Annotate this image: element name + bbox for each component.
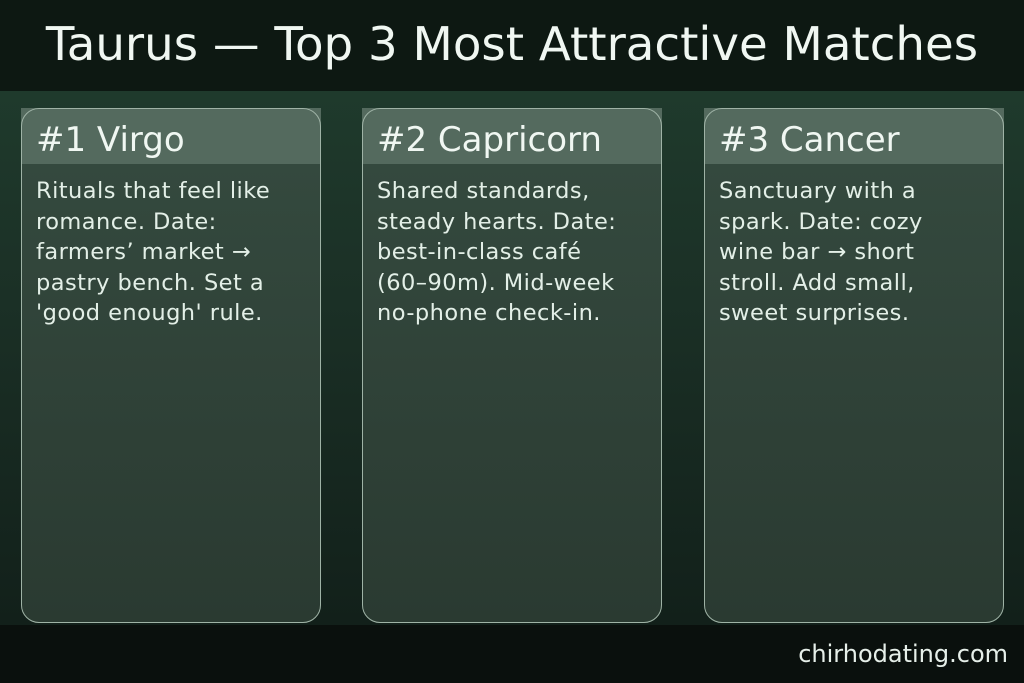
text: Capricorn: steady hearts. Date: (377, 208, 616, 234)
text: Virgo: 'good enough' rule. (36, 300, 263, 326)
text: Virgo: pastry bench. Set a (36, 270, 264, 296)
heading: #3 Cancer: #3 Cancer (719, 120, 900, 160)
panel: Virgo (21, 108, 321, 623)
text: Capricorn: (60–90m). Mid-week (377, 270, 615, 296)
text: Virgo: romance. Date: (36, 208, 217, 234)
text: Cancer: wine bar → short (719, 239, 914, 265)
text: Capricorn: Shared standards, (377, 178, 590, 204)
title: Taurus — Top 3 Most Attractive Matches (46, 18, 978, 72)
text: Virgo: farmers’ market → (36, 239, 251, 265)
footer (0, 625, 1024, 683)
heading: #3 Cancer (704, 108, 1004, 164)
footer: chirhodating.com (798, 640, 1008, 668)
panel: Capricorn (362, 108, 662, 623)
text: Cancer: sweet surprises. (719, 300, 909, 326)
heading: #1 Virgo (21, 108, 321, 164)
text: Virgo: Rituals that feel like (36, 178, 270, 204)
panel: Cancer (704, 108, 1004, 623)
text: Virgo (36, 178, 270, 326)
text: Cancer: stroll. Add small, (719, 270, 915, 296)
heading: #2 Capricorn (362, 108, 662, 164)
text: Capricorn (377, 178, 616, 326)
title (0, 0, 1024, 91)
text: Cancer (719, 178, 923, 326)
text: Cancer: Sanctuary with a (719, 178, 916, 204)
text: Capricorn: no-phone check-in. (377, 300, 601, 326)
heading: #2 Capricorn: #2 Capricorn (377, 120, 602, 160)
heading: #1 Virgo: #1 Virgo (36, 120, 185, 160)
text: Capricorn: best-in-class café (377, 239, 581, 265)
text: Cancer: spark. Date: cozy (719, 208, 923, 234)
